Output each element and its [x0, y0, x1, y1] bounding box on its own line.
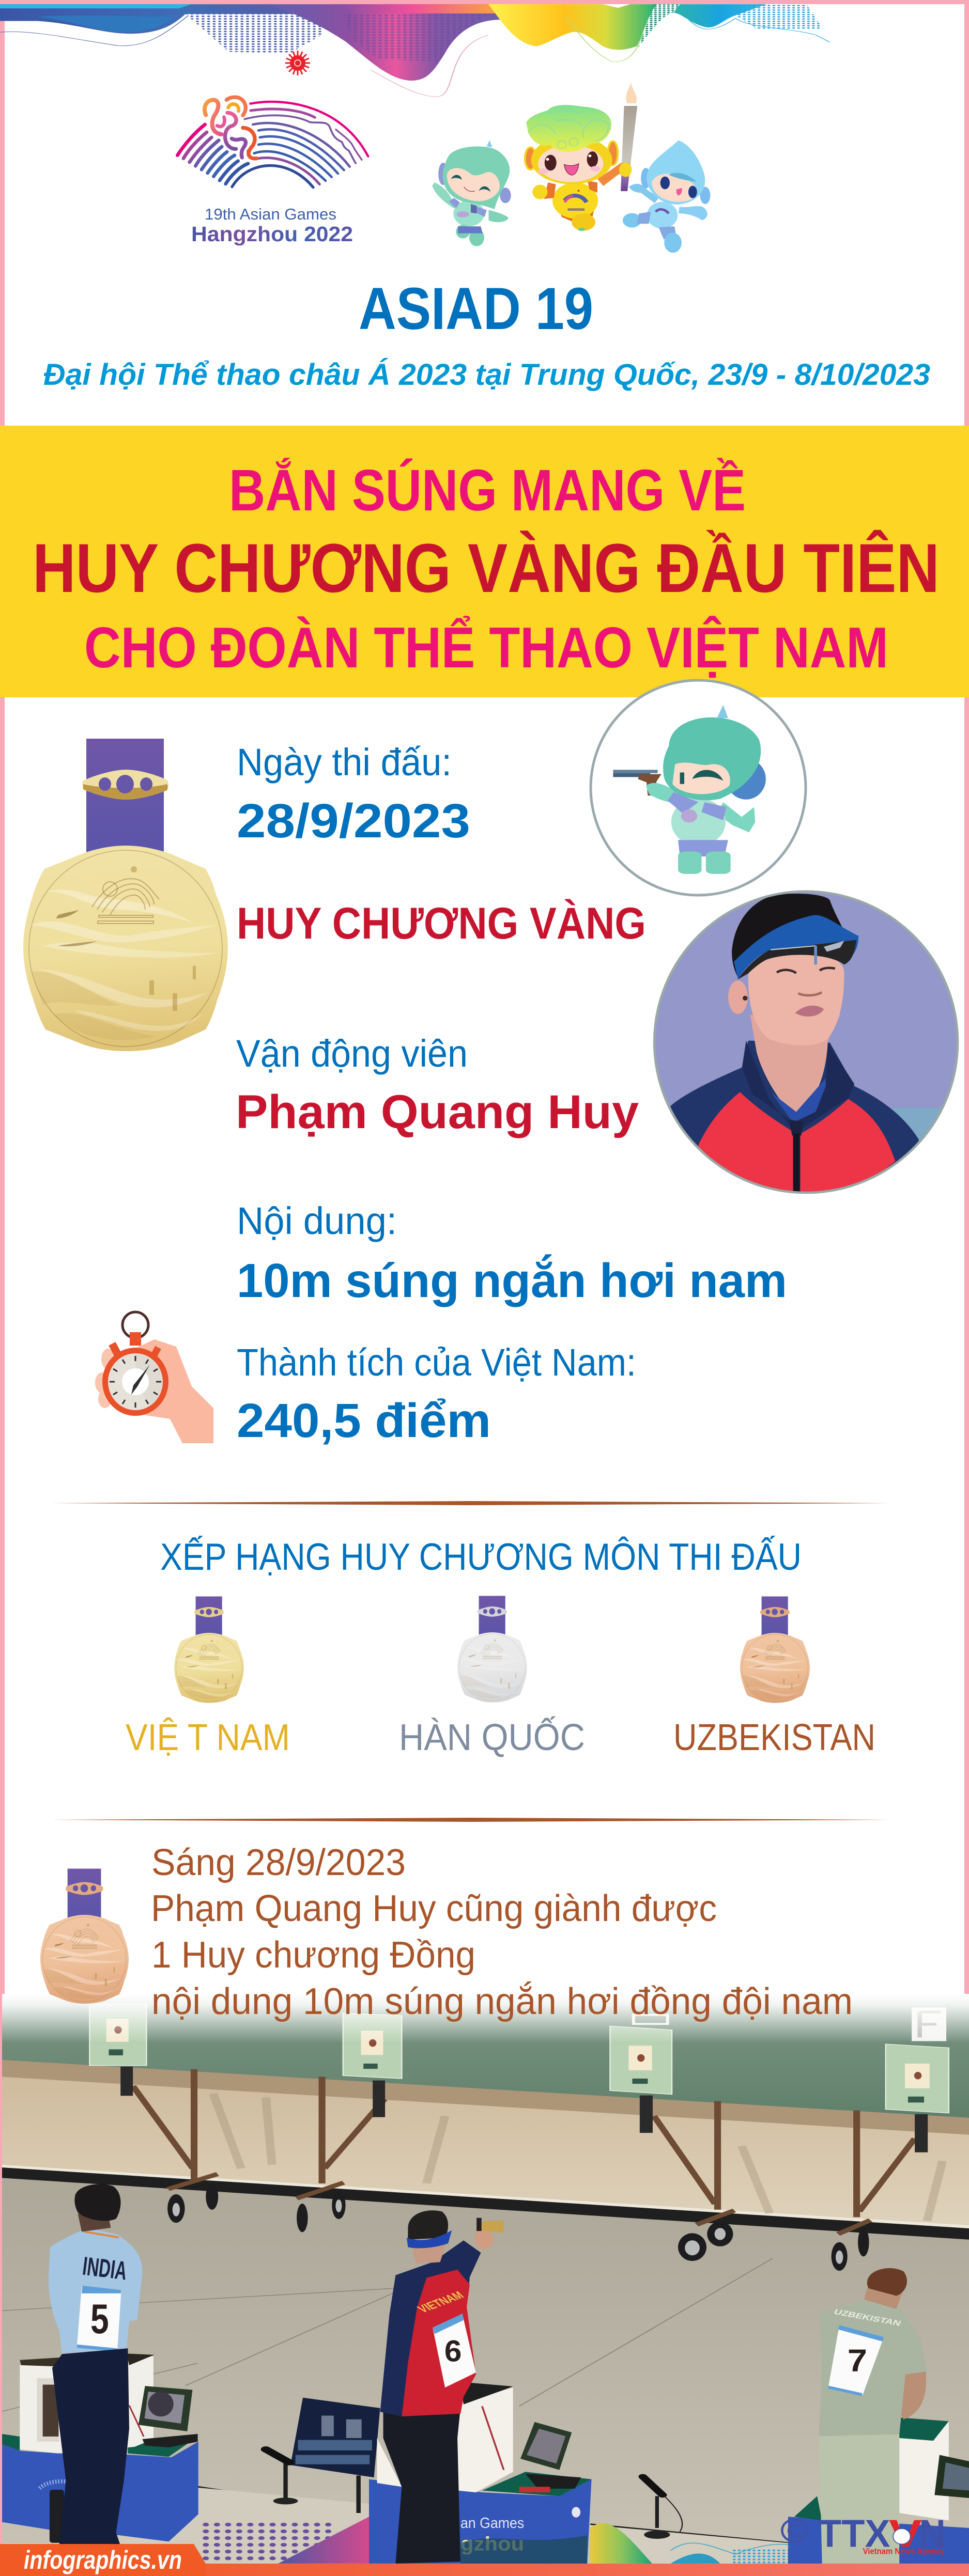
station: Vietnam athlete	[266, 2210, 592, 2564]
label: gold medal: HUY CHƯƠNG VÀNG	[237, 899, 646, 948]
text block: competition date: Ngày thi đấu:	[237, 741, 452, 784]
icon: small bronze medal	[740, 1597, 810, 1703]
mascot: yellow with torch	[525, 83, 637, 231]
ranking: Uzbekistan bronze: UZBEKISTAN	[673, 1717, 875, 1758]
icon: bronze medal	[40, 1869, 129, 2004]
callout text: Phạm Quang Huy cũng giành được	[151, 1888, 717, 1929]
text block: athlete	[236, 1032, 639, 1138]
icon: small gold medal	[174, 1597, 244, 1703]
icon: small silver medal	[457, 1596, 527, 1703]
bottom decorations in photo	[201, 2517, 788, 2564]
callout text: Sáng 28/9/2023	[151, 1842, 406, 1883]
station: India	[2, 2184, 198, 2544]
text block: event	[237, 1199, 787, 1307]
heading line 3: CHO ĐOÀN THỂ THAO VIỆT NAM	[84, 616, 888, 680]
ranking: Korea silver: HÀN QUỐC	[399, 1716, 585, 1758]
logo: TTXVN: V	[889, 2511, 922, 2555]
mascot: teal	[432, 140, 511, 246]
logo: TTXVN: C	[787, 2521, 802, 2541]
station: India: 5	[90, 2297, 109, 2343]
logo: TTXVN: Vietnam News Agency	[863, 2546, 945, 2556]
circle: shooter mascot	[591, 680, 806, 895]
logo: 19th Asian Games Hangzhou 2022: 19th Asian Games	[205, 205, 336, 223]
text block: result: 240,5 điểm	[237, 1394, 491, 1447]
text block: athlete: Vận động viên	[236, 1032, 468, 1075]
text block: result: Thành tích của Việt Nam:	[237, 1341, 636, 1384]
callout text: 1 Huy chương Đồng	[151, 1934, 475, 1976]
text block: athlete: Phạm Quang Huy	[236, 1086, 639, 1138]
logo: TTXVN: TTX	[818, 2511, 890, 2555]
station: Uzbekistan: UZBEKISTAN	[832, 2307, 902, 2328]
station: Vietnam athlete: gzhou	[460, 2533, 524, 2555]
ranking: Vietnam gold	[126, 1597, 290, 1758]
icon: gold medal	[23, 739, 228, 1051]
title: ASIAD 19: ASIAD 19	[359, 276, 593, 342]
ranking: Vietnam gold: VIỆ T NAM	[126, 1717, 290, 1758]
station: Vietnam athlete: an Games	[460, 2515, 524, 2532]
logo: 19th Asian Games Hangzhou 2022: Hangzhou 2022	[191, 222, 353, 246]
mat and cables	[198, 2487, 788, 2543]
logo: 19th Asian Games Hangzhou 2022	[177, 97, 368, 246]
station: Vietnam athlete: 6	[444, 2334, 462, 2368]
callout text	[151, 1842, 853, 2022]
logo: TTXVN: N	[919, 2511, 946, 2555]
text block: event: 10m súng ngắn hơi nam	[237, 1254, 787, 1307]
heading: medal ranking: XẾP HẠNG HUY CHƯƠNG MÔN THI ĐẤU	[160, 1536, 802, 1578]
ranking: Korea silver	[399, 1596, 585, 1758]
shooting targets	[89, 2004, 949, 2113]
mascot: blue	[623, 140, 710, 253]
station: Vietnam athlete: VIETNAM	[414, 2289, 467, 2315]
icon: stopwatch in hand	[95, 1312, 213, 1443]
header ribbon decoration	[0, 4, 829, 97]
text block: event: Nội dung:	[237, 1199, 397, 1242]
text block: competition date	[237, 741, 470, 848]
ranking: Uzbekistan bronze	[673, 1597, 875, 1758]
photo: shooting range	[0, 1989, 969, 2576]
logo: TTXVN	[782, 2511, 946, 2556]
station: Uzbekistan	[643, 2268, 969, 2564]
station: India: INDIA	[81, 2251, 129, 2285]
callout text: nội dung 10m súng ngắn hơi đồng đội nam	[151, 1981, 853, 2022]
bottom bar with site name	[0, 2544, 969, 2576]
heading line 1: BẮN SÚNG MANG VỀ	[229, 458, 746, 523]
icon: red sun emblem	[285, 51, 310, 75]
mascots: Congcong, Lianlian, Chenchen	[432, 83, 710, 253]
target stands	[120, 2067, 928, 2271]
panel: yellow headline band	[0, 426, 969, 697]
bottom bar with site name: infographics.vn	[24, 2546, 182, 2574]
station: Uzbekistan: 7	[848, 2343, 867, 2378]
callout: team bronze medal	[40, 1842, 853, 2022]
text block: competition date: 28/9/2023	[237, 794, 470, 848]
text block: result	[237, 1341, 636, 1447]
subtitle: event dates: Đại hội Thể thao châu Á 2023 tại Trung Quốc, 23/9 - 8/10/2023	[43, 358, 930, 392]
photo: athlete portrait	[654, 892, 963, 1197]
